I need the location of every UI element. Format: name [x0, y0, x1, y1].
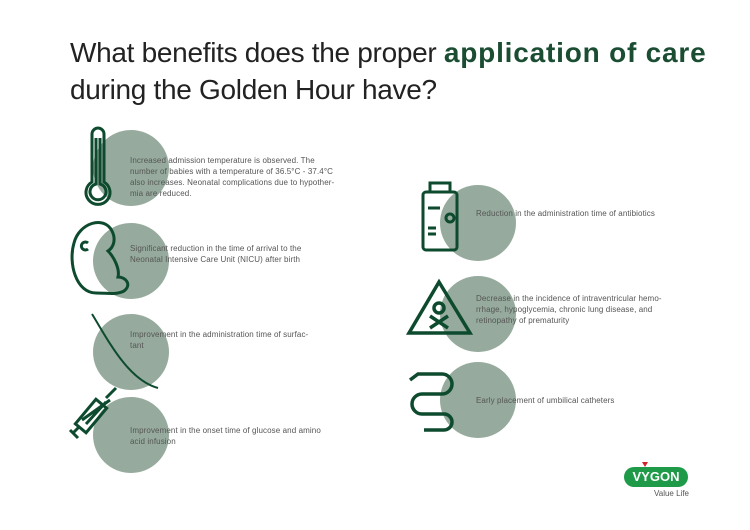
icon: syringe — [69, 387, 117, 439]
text 6: rrhage, hypoglycemia, chronic lung disease, and — [476, 305, 652, 314]
item: NICU — [70, 221, 301, 299]
icon: bottle — [422, 182, 458, 252]
title: during the Golden Hour have? — [70, 74, 437, 105]
text 4: acid infusion — [130, 437, 176, 446]
text 3: Improvement in the administration time of surfac- — [130, 330, 308, 339]
text 6 — [476, 294, 662, 325]
title: What benefits does the proper application of care — [70, 37, 706, 68]
circle 7 — [440, 362, 516, 438]
logo — [624, 462, 689, 498]
item: umbilical catheters — [409, 362, 615, 438]
text 6: Decrease in the incidence of intraventricular hemo- — [476, 294, 662, 303]
logo: VYGON — [633, 469, 679, 484]
logo: Value Life — [654, 489, 689, 498]
text 2: Significant reduction in the time of arrival to the — [130, 244, 301, 253]
circle 6 — [440, 276, 516, 352]
circle 5 — [440, 185, 516, 261]
item: surfactant — [91, 314, 308, 390]
title — [70, 37, 706, 105]
text 3: tant — [130, 341, 144, 350]
circle 1 — [93, 130, 169, 206]
text 1 — [130, 156, 334, 198]
icon: baby — [70, 221, 130, 295]
item: complications — [406, 276, 662, 352]
circle 4 — [93, 397, 169, 473]
text 6: retinopathy of prematurity — [476, 316, 569, 325]
text 7: Early placement of umbilical catheters — [476, 396, 615, 405]
item: antibiotics — [422, 182, 655, 261]
item: glucose — [69, 387, 321, 473]
text 1: mia are reduced. — [130, 189, 192, 198]
icon: catheter line — [91, 314, 158, 389]
text 1: number of babies with a temperature of 36.5°C - 37.4°C — [130, 167, 333, 176]
text 2: Neonatal Intensive Care Unit (NICU) after birth — [130, 255, 300, 264]
circle 2 — [93, 223, 169, 299]
text 3 — [130, 330, 308, 350]
text 1: Increased admission temperature is observed. The — [130, 156, 315, 165]
text 4 — [130, 426, 321, 446]
circle 3 — [93, 314, 169, 390]
text 1: also increases. Neonatal complications due to hypother- — [130, 178, 334, 187]
icon: warning — [406, 278, 473, 335]
text 4: Improvement in the onset time of glucose and amino — [130, 426, 321, 435]
icon: catheter — [409, 372, 454, 432]
icon: thermometer — [84, 126, 112, 206]
text 5: Reduction in the administration time of antibiotics — [476, 209, 655, 218]
item: temperature — [84, 126, 334, 206]
text 2 — [130, 244, 301, 264]
